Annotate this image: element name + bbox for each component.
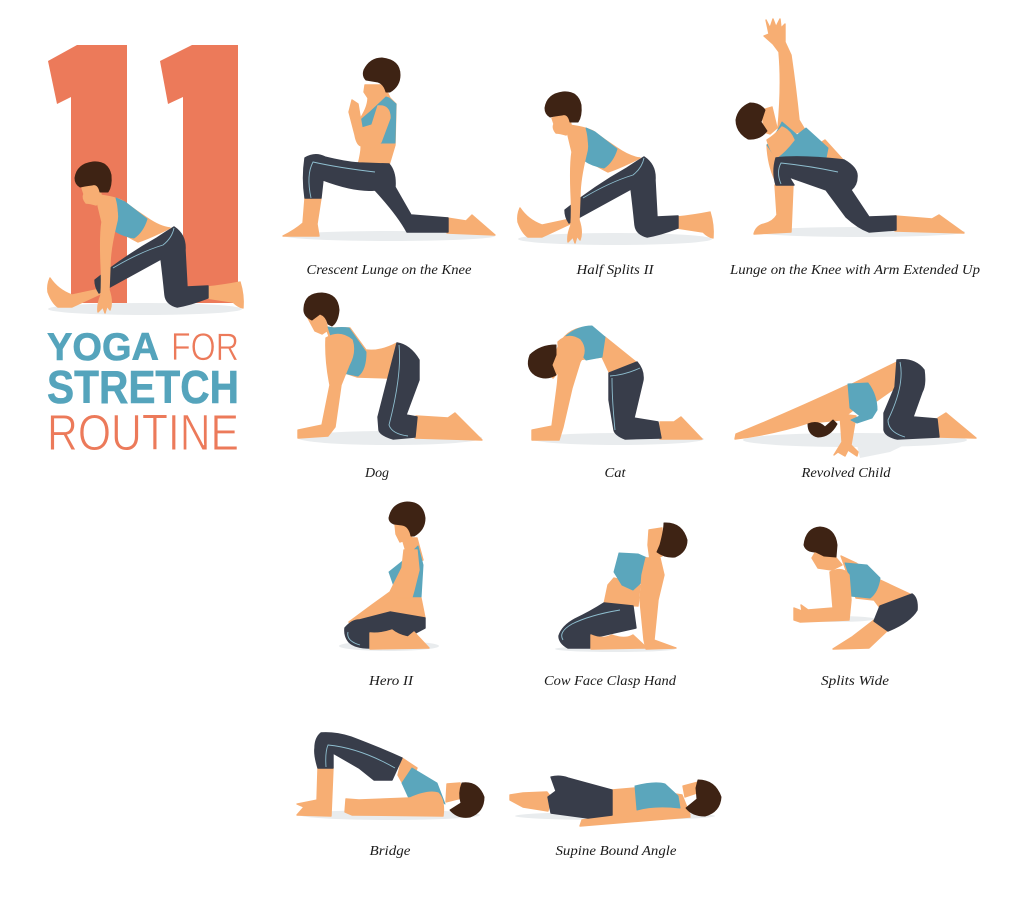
title [47,326,239,461]
pose captions: Cat [604,465,627,480]
figure: hero II [339,502,439,651]
title: FOR [171,326,239,369]
figure: lunge on the knee with arm extended up [736,19,965,237]
big number 11 [48,45,238,303]
pose captions: Cow Face Clasp Hand [544,673,676,688]
pose captions [306,262,980,858]
title: ROUTINE [47,404,239,461]
figure: dog [298,293,482,445]
figure: supine bound angle [510,776,721,826]
figure: splits wide [794,527,917,649]
pose captions: Splits Wide [821,673,889,688]
pose captions: Lunge on the Knee with Arm Extended Up [729,262,980,277]
title: STRETCH [47,361,239,413]
pose captions: Bridge [370,843,411,858]
figure: half splits II [518,92,713,245]
pose captions: Revolved Child [800,465,891,480]
figure: half splits on the number [48,162,243,315]
pose captions: Supine Bound Angle [556,843,677,858]
figure: cow face clasp hand [555,523,687,652]
pose captions: Dog [364,465,389,480]
figure: crescent lunge on the knee [283,58,495,241]
figure: revolved child [735,360,976,458]
pose captions: Hero II [368,673,415,688]
pose captions: Crescent Lunge on the Knee [306,262,472,277]
figure: cat [528,326,704,445]
pose captions: Half Splits II [575,262,655,277]
figure: bridge [297,733,484,820]
title: YOGA [47,326,159,369]
